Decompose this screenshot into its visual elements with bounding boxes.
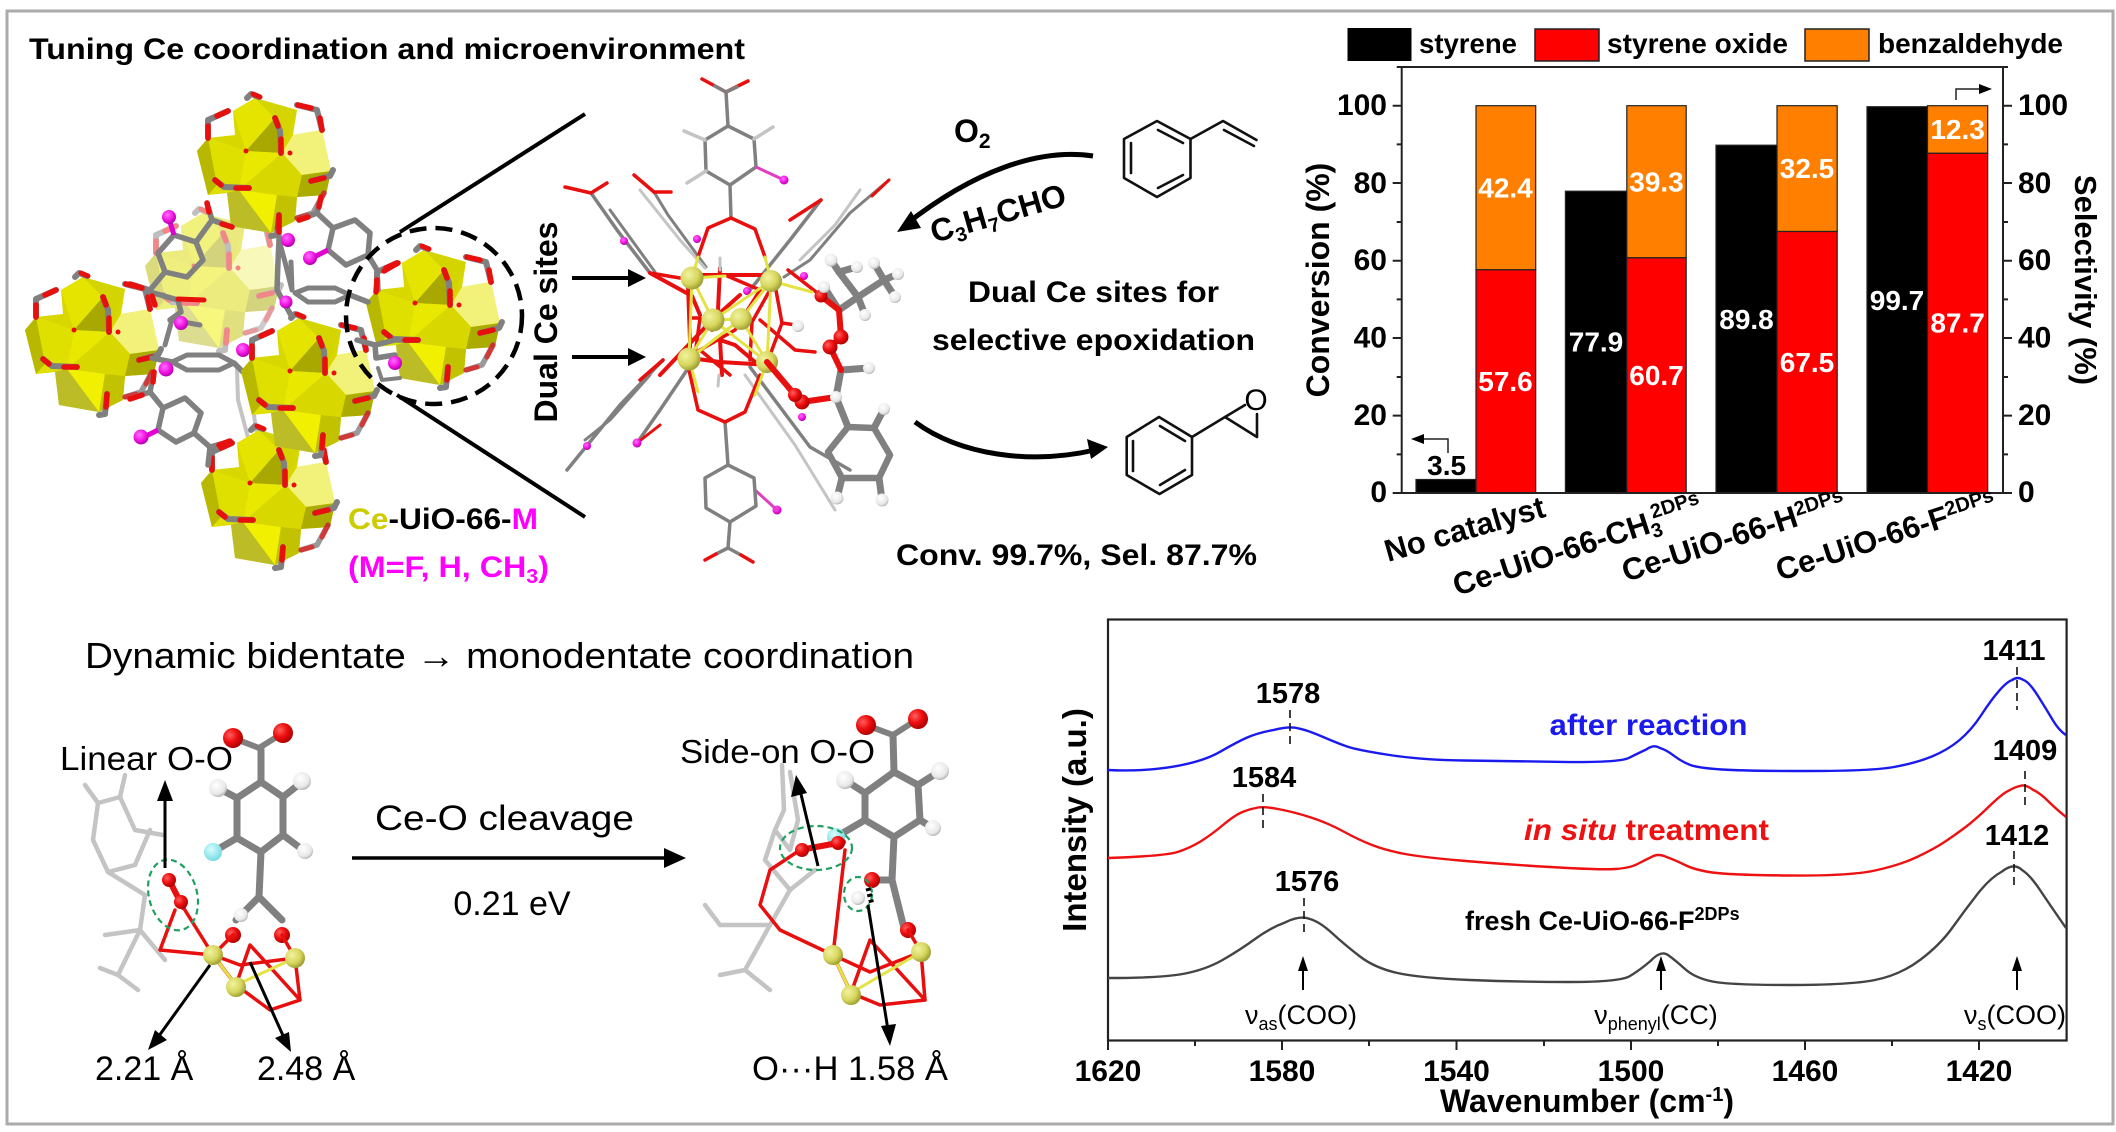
label: 0.21 eV: 0.21 eV <box>453 885 571 923</box>
x axis labels: 1460 <box>1772 1055 1838 1088</box>
left axis labels: 40 <box>1354 322 1387 354</box>
Ce-O framework <box>160 907 300 1010</box>
band labels <box>1245 1000 2066 1034</box>
x axis title: Wavenumber (cm <box>1440 1083 1706 1119</box>
category labels: Ce-UiO-66-H <box>1617 499 1802 589</box>
peak labels: 1411 <box>1983 635 2045 667</box>
label: linear O-O: Linear O-O <box>60 740 233 777</box>
right axis labels: 100 <box>2018 89 2068 122</box>
dual Ce cluster model <box>565 79 889 562</box>
arrow: linear O-O <box>157 780 173 868</box>
legend: benzaldehyde <box>1878 28 2063 59</box>
left axis labels: 80 <box>1354 167 1387 200</box>
bar values: 12.3 <box>1930 114 1985 145</box>
band labels: phenyl <box>1608 1014 1661 1034</box>
right axis labels: 40 <box>2018 322 2051 354</box>
legend <box>1348 28 2063 61</box>
label: side-on O-O: Side-on O-O <box>680 733 875 770</box>
left axis labels <box>1337 89 1387 509</box>
hydrogen bond <box>868 888 872 905</box>
linker: centre right <box>357 340 418 380</box>
reagent arrow <box>897 154 1093 232</box>
MOF framework structure <box>25 94 522 568</box>
cluster: centre <box>241 314 377 456</box>
left axis labels: 0 <box>1370 476 1387 509</box>
bar values: 32.5 <box>1780 153 1834 184</box>
left axis labels: 60 <box>1354 244 1387 277</box>
Ce-O bonds <box>650 218 820 422</box>
left axis labels: 20 <box>1354 399 1387 432</box>
label: fresh catalyst: fresh Ce-UiO-66-F <box>1465 906 1695 936</box>
butyraldehyde reagent: C <box>926 209 958 250</box>
product arrow <box>915 422 1108 459</box>
peroxo intermediate ball and stick <box>767 254 904 506</box>
performance caption: Conv. 99.7%, Sel. 87.7% <box>896 539 1257 572</box>
MOF caption <box>348 503 549 588</box>
O-O pair <box>162 873 188 909</box>
right axis labels: 60 <box>2018 244 2051 277</box>
peak markers <box>1263 667 2025 932</box>
butyraldehyde reagent: 7 <box>986 214 1003 238</box>
styrene oxide molecule <box>1127 384 1268 494</box>
category labels <box>1380 483 2000 606</box>
band labels: (COO) <box>1987 1000 2066 1030</box>
x axis labels: 1620 <box>1075 1055 1141 1088</box>
butyraldehyde reagent: H <box>959 199 991 240</box>
oxygen reagent: O <box>954 113 979 149</box>
peak labels: 1412 <box>1985 820 2049 852</box>
bar values: 77.9 <box>1569 327 1623 358</box>
bar values: 42.4 <box>1478 173 1533 204</box>
dashed green rings <box>780 826 872 911</box>
plot frame and ticks <box>1108 620 2067 1050</box>
cluster: bottom <box>201 426 337 568</box>
label dashed circle <box>346 228 522 404</box>
aromatic ring <box>213 748 303 920</box>
left axis labels: 100 <box>1337 89 1387 122</box>
legend: styrene oxide <box>1607 28 1788 59</box>
linkers, rear <box>565 79 889 562</box>
linker: lower left <box>130 372 230 465</box>
category labels: 3 <box>1649 519 1666 543</box>
selectivity axis title: Selectivity (%) <box>2068 175 2103 385</box>
dashed green ring <box>141 854 205 936</box>
butyraldehyde reagent: CHO <box>992 177 1070 231</box>
arrows: bond lengths A <box>148 962 291 1052</box>
trace: fresh catalyst <box>1108 866 2066 985</box>
Ce atoms <box>678 266 782 373</box>
category labels: Ce-UiO-66-F <box>1771 499 1953 588</box>
trace: after reaction <box>1108 678 2066 771</box>
spectrum chart <box>1056 620 2067 1119</box>
linker: left horizontal <box>152 343 250 376</box>
right axis labels: 20 <box>2018 399 2051 432</box>
peak labels: 1576 <box>1275 866 1339 898</box>
label: 2.48 angstrom: 2.48 Å <box>257 1050 356 1088</box>
bar values <box>1427 114 1985 481</box>
reaction caption: selective epoxidation <box>932 324 1255 357</box>
y axis title: Intensity (a.u.) <box>1056 708 1093 932</box>
label: 2.21 angstrom: 2.21 Å <box>95 1050 194 1088</box>
band arrows <box>1298 956 2022 990</box>
category labels: No catalyst <box>1380 489 1549 569</box>
right axis labels <box>2018 89 2068 509</box>
cluster: left <box>25 273 161 415</box>
MOF caption: 3 <box>526 566 538 588</box>
category labels: 2DPs <box>1791 484 1846 521</box>
x axis title: -1 <box>1706 1084 1723 1106</box>
category labels: 2DPs <box>1648 487 1702 523</box>
butyraldehyde reagent: 3 <box>953 223 970 247</box>
bars <box>1416 106 1988 493</box>
linker: central horizontal <box>280 288 368 308</box>
band labels: (CC) <box>1661 1000 1718 1030</box>
x axis labels: 1420 <box>1946 1055 2012 1088</box>
bar values: 99.7 <box>1870 285 1924 316</box>
band labels: ν <box>1964 1000 1978 1030</box>
x axis title: ) <box>1723 1083 1734 1119</box>
title: Tuning Ce coordination and microenvironment <box>29 33 745 66</box>
linker: central vertical <box>277 217 295 317</box>
rear linkers <box>150 292 256 445</box>
reaction caption: Dual Ce sites for <box>968 276 1219 309</box>
peak labels: 1584 <box>1232 762 1296 794</box>
band labels: as <box>1258 1014 1278 1034</box>
arrow: side-on O-O <box>791 775 818 866</box>
right axis labels: 80 <box>2018 167 2051 200</box>
label: Ce-O cleavage: Ce-O cleavage <box>375 799 634 838</box>
bar values: 87.7 <box>1930 308 1985 339</box>
x axis labels <box>1075 1055 2012 1088</box>
zoom callout lines <box>397 114 585 517</box>
molecule A: linear O-O bidentate <box>85 723 313 1010</box>
peak labels: 1578 <box>1256 678 1320 710</box>
arrow: O-H distance <box>868 905 896 1046</box>
O-O pair <box>795 836 845 857</box>
conversion axis title: Conversion (%) <box>1300 163 1336 397</box>
direction arrows <box>1411 84 1992 453</box>
MOF caption: ) <box>538 551 549 584</box>
bottom section heading: Dynamic bidentate → monodentate coordination <box>85 635 914 676</box>
category labels: 2DPs <box>1942 485 1996 521</box>
reaction caption <box>932 276 1255 357</box>
band labels: ν <box>1245 1000 1258 1030</box>
reaction arrow A to B <box>352 848 686 868</box>
x axis labels: 1580 <box>1249 1055 1315 1088</box>
peak labels <box>1232 635 2057 898</box>
oxygen reagent: 2 <box>979 130 991 153</box>
styrene oxide molecule: O <box>1244 384 1268 417</box>
linker: upper left <box>130 203 232 305</box>
Ce-O framework <box>760 850 925 1005</box>
phenyl and tert-butyl fragments <box>705 765 815 990</box>
cluster: top <box>197 94 333 236</box>
peak labels: 1409 <box>1993 735 2057 767</box>
axes <box>1393 67 2012 493</box>
faded rear cluster <box>145 209 281 351</box>
MOF caption: Ce-UiO-66-M <box>348 503 538 536</box>
bar chart: conversion and selectivity <box>1300 28 2103 606</box>
arrows to Ce sites <box>572 269 646 366</box>
legend: styrene <box>1419 28 1517 59</box>
molecule B: side-on O-O monodentate <box>705 709 949 1005</box>
bar values: 57.6 <box>1478 366 1533 397</box>
band labels: (COO) <box>1278 1000 1357 1030</box>
label: O-H distance: O···H 1.58 Å <box>752 1050 948 1088</box>
bar values: 3.5 <box>1427 450 1466 481</box>
x axis labels: 1500 <box>1598 1055 1664 1088</box>
bar values: 39.3 <box>1629 167 1684 198</box>
label: after reaction: after reaction <box>1550 709 1748 742</box>
trace: in situ <box>1108 785 2066 876</box>
label: in situ treatment: in situ treatment <box>1524 814 1769 847</box>
phenyl and tert-butyl fragments <box>85 775 165 990</box>
right axis labels: 0 <box>2018 476 2035 509</box>
band labels: ν <box>1594 1000 1608 1030</box>
aromatic ring <box>836 735 940 932</box>
styrene molecule <box>1124 121 1256 197</box>
cluster: circled right <box>366 246 502 388</box>
dual Ce sites label: Dual Ce sites <box>528 222 564 422</box>
category labels: Ce-UiO-66-CH <box>1448 506 1654 603</box>
MOF caption: (M=F, H, CH <box>348 551 514 584</box>
x axis labels: 1540 <box>1423 1055 1490 1088</box>
bar values: 60.7 <box>1629 360 1684 391</box>
bar values: 67.5 <box>1780 347 1834 378</box>
linker: upper right <box>299 197 398 292</box>
bar values: 89.8 <box>1719 304 1774 335</box>
band labels: s <box>1978 1014 1987 1034</box>
label: fresh catalyst: 2DPs <box>1695 904 1740 924</box>
